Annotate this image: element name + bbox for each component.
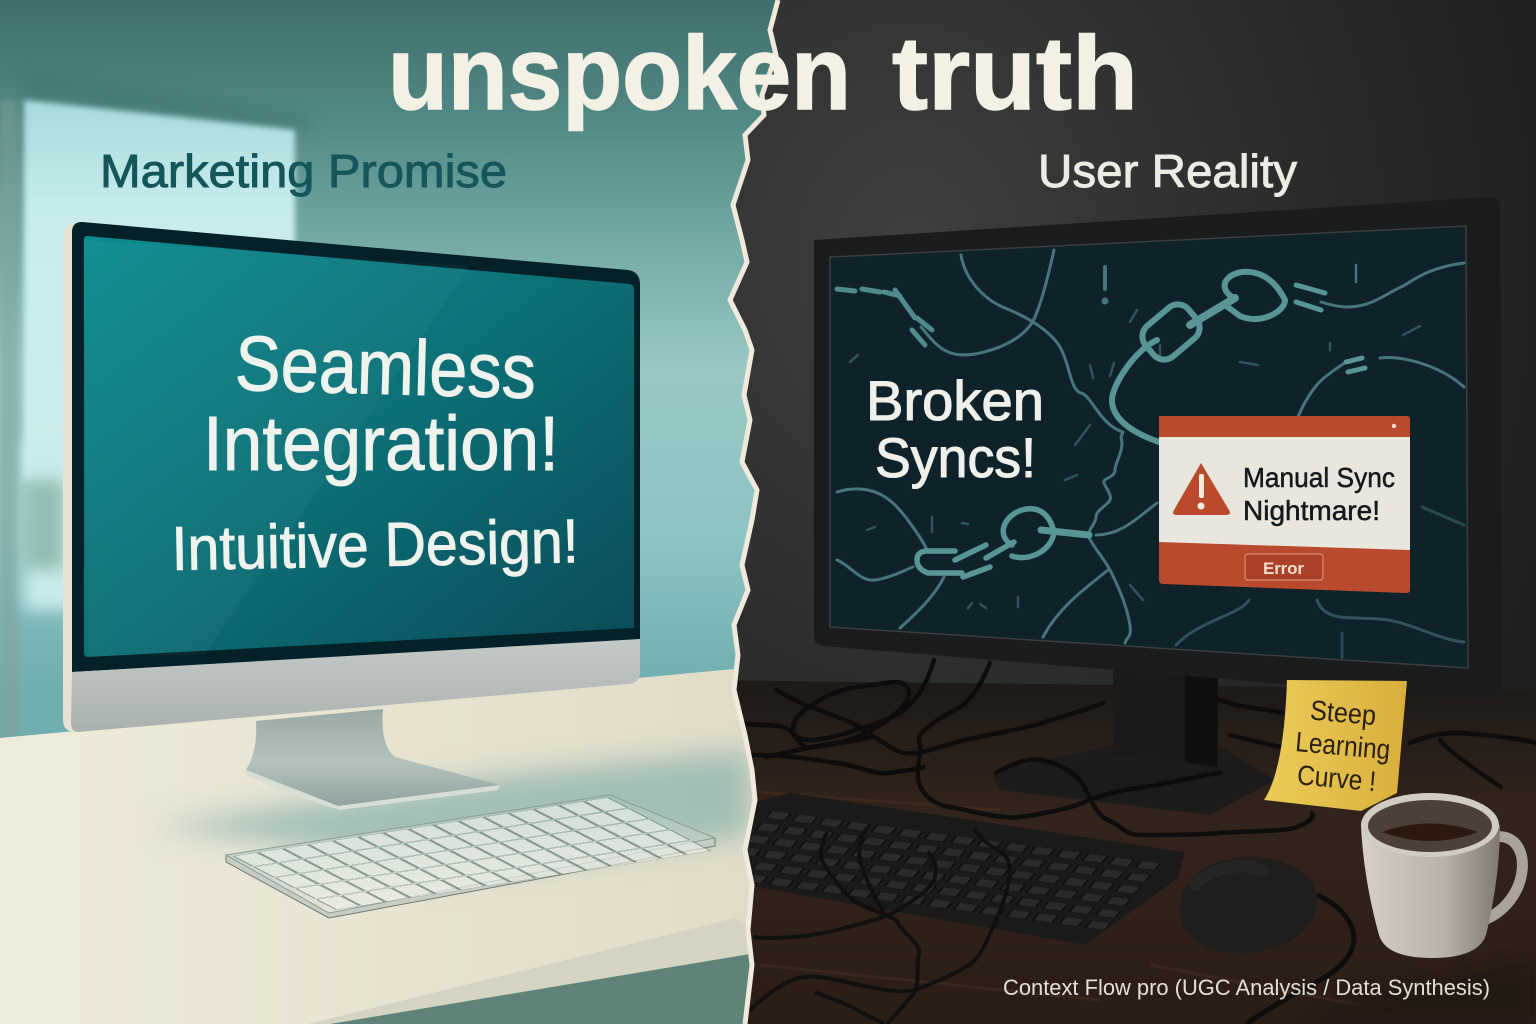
broken chain: upper left <box>837 289 932 345</box>
monitor stand neck <box>1113 670 1185 745</box>
screen copy <box>171 319 579 584</box>
error button: Error <box>1263 559 1304 578</box>
panel: user reality scene <box>700 0 1536 1024</box>
icon: warning triangle <box>1173 463 1230 515</box>
mouse <box>1180 857 1354 1024</box>
title: truth <box>892 16 1138 132</box>
screen <box>830 226 1468 668</box>
monitor chin <box>71 639 640 732</box>
coffee mug <box>1361 793 1522 958</box>
screen <box>84 236 634 657</box>
source caption: Context Flow pro (UGC Analysis / Data Synthesis) <box>1003 975 1490 1000</box>
monitor: silver display <box>63 222 640 810</box>
monitor base <box>993 745 1275 815</box>
broken cables and cracks on screen <box>837 250 1464 657</box>
monitor: black display <box>814 197 1502 701</box>
dialog message: Manual Sync <box>1243 462 1395 493</box>
note text: curve: Curve ! <box>1296 759 1377 797</box>
broken chain: upper right <box>1112 272 1365 442</box>
title: unspoken <box>388 16 851 132</box>
screen text: broken syncs: Broken <box>866 369 1044 432</box>
keyboard <box>226 795 715 918</box>
broken chain: lower <box>917 509 1089 577</box>
tangled cables behind keyboard <box>735 660 1536 835</box>
cables over keyboard <box>750 827 1010 1024</box>
note text: learning: Learning <box>1294 726 1392 765</box>
dialog message: Nightmare! <box>1243 495 1380 526</box>
panel: marketing promise scene <box>0 0 800 1024</box>
error button <box>1245 554 1323 580</box>
monitor stand <box>246 709 500 810</box>
screen text: broken syncs: Syncs! <box>875 426 1036 489</box>
title <box>388 16 1138 132</box>
headline: seamless: Seamless <box>234 319 537 415</box>
torn paper edge <box>730 0 778 1024</box>
screen text: broken syncs <box>870 379 1041 489</box>
error dialog <box>1159 416 1410 593</box>
heading: user reality: User Reality <box>1038 145 1297 197</box>
headline: intuitive design: Intuitive Design! <box>171 507 579 584</box>
sticky note <box>1264 680 1407 811</box>
keyboard <box>711 793 1185 945</box>
heading: marketing promise: Marketing Promise <box>100 145 507 197</box>
dialog message <box>1243 462 1395 526</box>
note text: steep: Steep <box>1309 694 1377 731</box>
headline: integration: Integration! <box>203 401 559 487</box>
